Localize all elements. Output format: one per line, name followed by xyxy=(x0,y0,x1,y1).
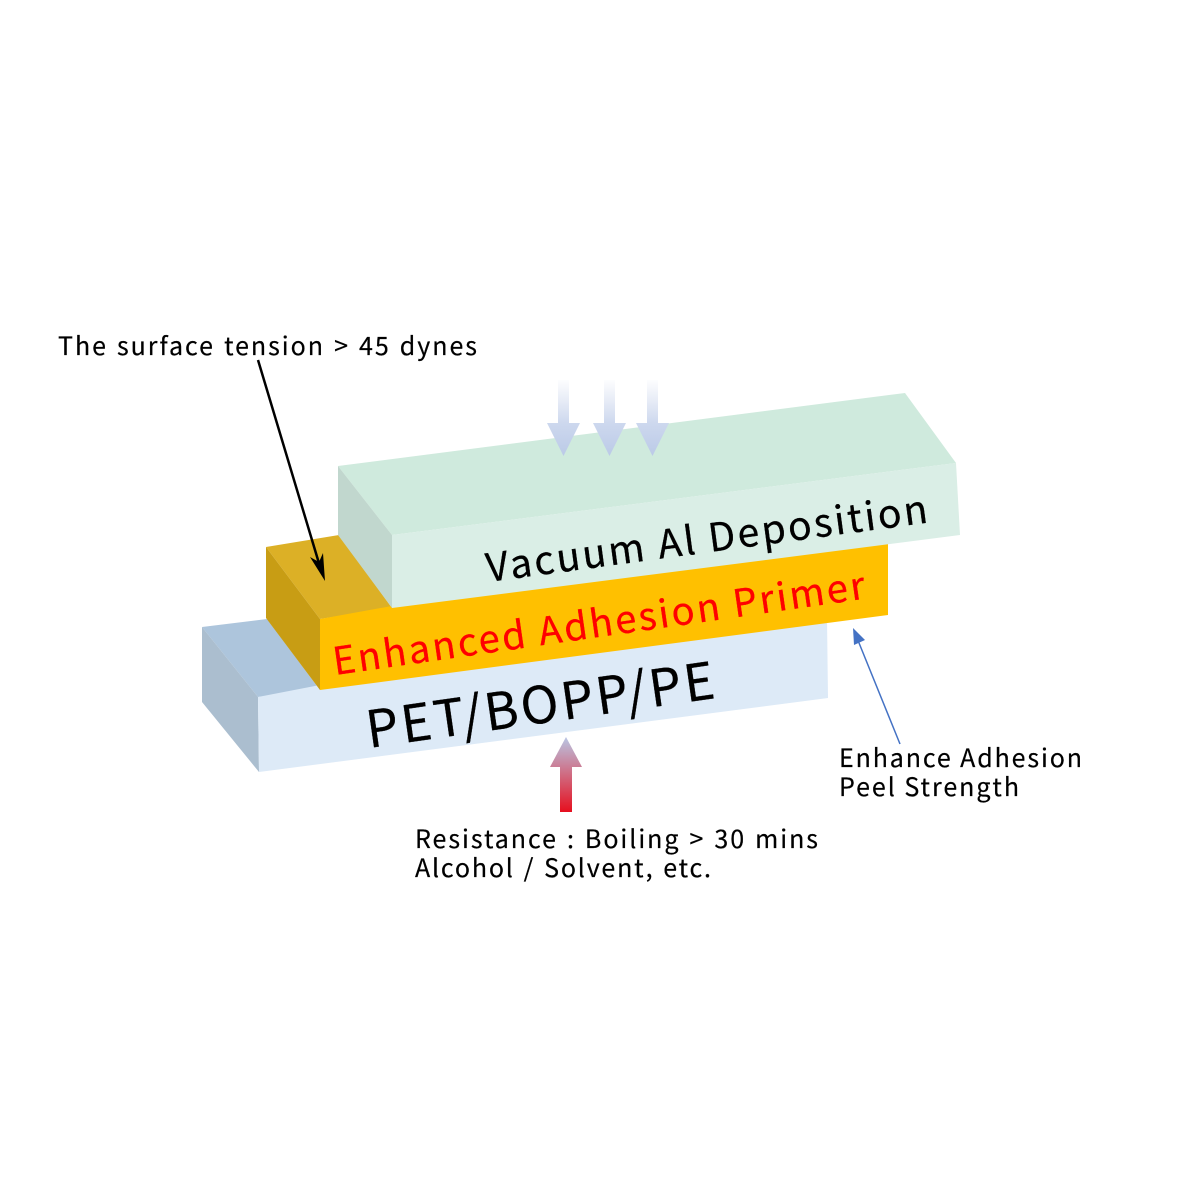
layer: PET/BOPP/PE base film xyxy=(202,618,828,772)
icon: three deposition arrows pointing down xyxy=(547,380,669,456)
arrow: adhesion pointer xyxy=(853,628,900,744)
callout: resistance: Resistance : Boiling > 30 mins xyxy=(415,820,818,856)
callout: adhesion and peel strength xyxy=(839,739,1082,804)
layer: vacuum aluminium deposition xyxy=(338,393,960,608)
callout: resistance xyxy=(415,820,818,885)
callout: surface tension: The surface tension > 45 dynes xyxy=(58,327,477,363)
label: PET/BOPP/PE: PET/BOPP/PE xyxy=(361,640,719,763)
arrow: surface tension pointer xyxy=(258,360,325,581)
callout: adhesion and peel strength: Peel Strength xyxy=(839,768,1019,804)
label: Enhanced Adhesion Primer: Enhanced Adhesion Primer xyxy=(329,555,868,686)
layer: enhanced adhesion primer xyxy=(266,535,888,690)
icon: red resistance arrow pointing up xyxy=(550,737,582,812)
callout: adhesion and peel strength: Enhance Adhesion xyxy=(839,739,1082,775)
label: Vacuum Al Deposition: Vacuum Al Deposition xyxy=(482,479,931,594)
callout: resistance: Alcohol / Solvent, etc. xyxy=(415,849,711,885)
